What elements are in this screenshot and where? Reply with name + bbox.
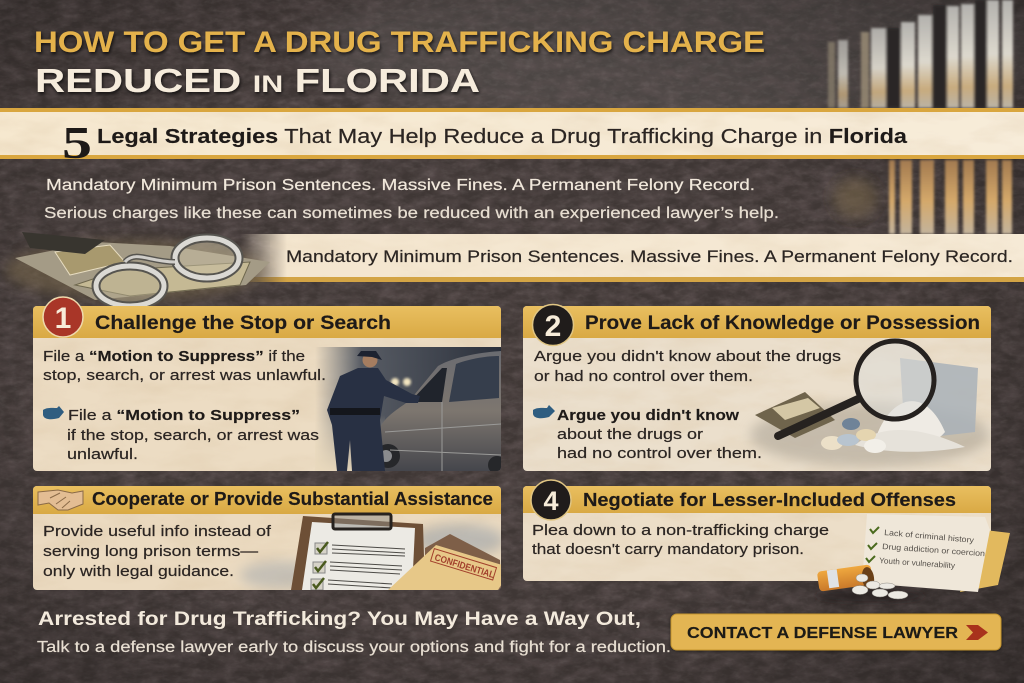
illustration: confidential folder: CONFIDENTIAL [433, 552, 496, 581]
icon: red arrow [966, 625, 988, 640]
illustration: pill bottle [815, 564, 925, 603]
illustration: confidential folder [388, 534, 512, 590]
card 4 paragraph: that doesn't carry mandatory prison. [532, 541, 804, 558]
jail window bars lower right [833, 160, 1012, 234]
icon: blue pointer [533, 405, 555, 418]
illustration: magnifier, bag, cash and pills [750, 341, 990, 467]
card 4 title: Negotiate for Lesser-Included Offenses [583, 489, 956, 510]
footer heading: Arrested for Drug Trafficking? You May Have a Way Out, [38, 609, 641, 630]
intro line 1: Mandatory Minimum Prison Sentences. Massive Fines. A Permanent Felony Record. [46, 177, 755, 194]
card 1 paragraph [43, 348, 326, 384]
card 3 paragraph: serving long prison terms— [43, 543, 258, 560]
callout text: Mandatory Minimum Prison Sentences. Massive Fines. A Permanent Felony Record. [286, 247, 1013, 266]
illustration: checklist note [862, 514, 1010, 592]
card 2 bullet text: had no control over them. [557, 445, 762, 462]
big number 5: 5 [62, 117, 92, 168]
illustration: checklist note: Lack of criminal history [884, 528, 974, 545]
icon: handshake [38, 490, 83, 510]
circle badge 1: 1 [55, 302, 71, 335]
button: contact a defense lawyer: CONTACT A DEFENSE LAWYER [687, 625, 958, 642]
card 1 bullet text: if the stop, search, or arrest was [67, 427, 319, 444]
panel: strategy 3 [33, 486, 512, 590]
card 1 bullet text: File a “Motion to Suppress” [68, 407, 300, 424]
button: contact a defense lawyer [671, 614, 1001, 650]
title line 2: REDUCED IN FLORIDA [35, 62, 480, 99]
card 2 bullet text [557, 407, 762, 462]
intro line 2: Serious charges like these can sometimes be reduced with an experienced lawyer’s help. [44, 205, 779, 222]
card 4 paragraph [532, 522, 829, 558]
panel: strategy 2 [523, 304, 991, 471]
officer [327, 368, 420, 471]
card 1 paragraph: File a “Motion to Suppress” if the [43, 348, 305, 365]
icon: handcuffs and cash [5, 232, 270, 306]
card 2 title: Prove Lack of Knowledge or Possession [585, 313, 980, 334]
card 1 paragraph: stop, search, or arrest was unlawful. [43, 367, 326, 384]
card 2 bullet text: Argue you didn't know [557, 407, 739, 424]
card 3 title: Cooperate or Provide Substantial Assistance [92, 489, 493, 509]
title [34, 26, 765, 99]
callout banner with handcuffs [5, 232, 1024, 306]
circle badge 4: 4 [543, 486, 559, 516]
jail window bars upper right [828, 0, 1013, 108]
card 1 bullet text [67, 407, 319, 463]
card 2 paragraph: or had no control over them. [534, 368, 753, 385]
card 3 paragraph [43, 523, 272, 580]
illustration: clipboard [291, 514, 425, 590]
circle badge 1 [43, 297, 83, 337]
subtitle banner [0, 108, 1024, 168]
illustration: officer at car [315, 347, 506, 474]
circle badge 2: 2 [545, 310, 561, 343]
card 1 bullet text: unlawful. [67, 446, 138, 463]
footer subtext: Talk to a defense lawyer early to discuss your options and fight for a reduction. [37, 639, 671, 656]
car [375, 351, 501, 471]
card 4 paragraph: Plea down to a non-trafficking charge [532, 522, 829, 539]
card 2 paragraph [534, 348, 841, 385]
circle badge 4 [531, 480, 571, 520]
title line 1: HOW TO GET A DRUG TRAFFICKING CHARGE [34, 26, 765, 59]
card 1 title: Challenge the Stop or Search [95, 313, 391, 334]
card 2 paragraph: Argue you didn't know about the drugs [534, 348, 841, 365]
circle badge 2 [532, 304, 574, 346]
panel: strategy 4 [523, 480, 1010, 603]
icon: blue pointer [43, 406, 64, 419]
card 2 bullet text: about the drugs or [557, 426, 703, 443]
banner heading: Legal Strategies That May Help Reduce a Drug Trafficking Charge in Florida [97, 126, 908, 148]
illustration: checklist note: Youth or vulnerability [879, 556, 955, 570]
panel: strategy 1 [33, 297, 506, 474]
illustration: checklist note: Drug addiction or coercion [882, 542, 985, 558]
card 3 paragraph: Provide useful info instead of [43, 523, 272, 540]
footer call to action text [37, 609, 671, 656]
intro text [44, 177, 779, 222]
card 3 paragraph: only with legal guidance. [43, 563, 234, 580]
